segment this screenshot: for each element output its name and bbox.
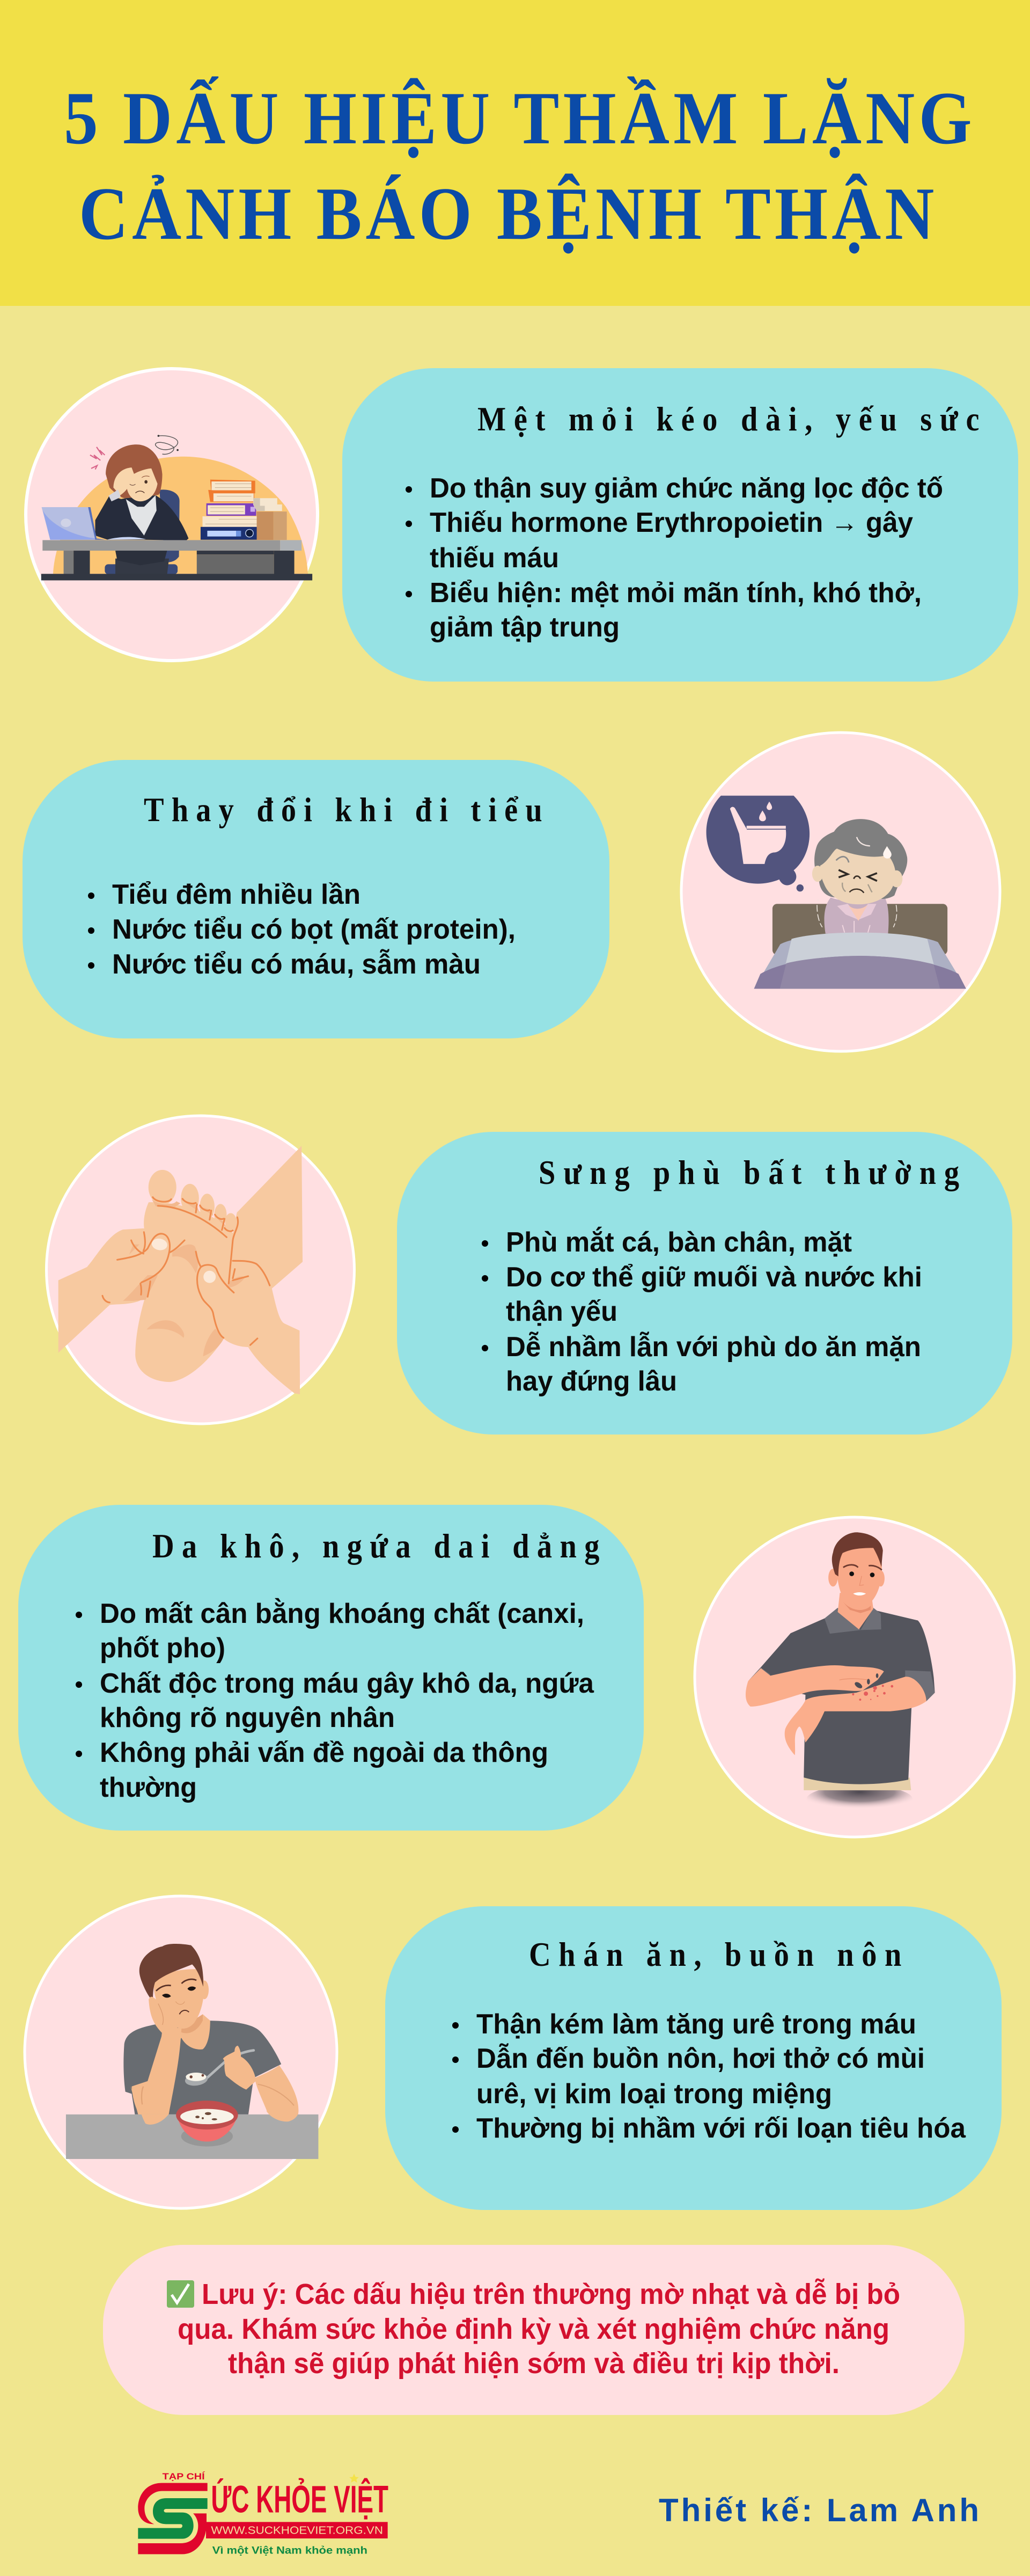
panel: sign 5 loss of appetite bbox=[385, 1906, 1002, 2210]
note text bbox=[178, 2278, 900, 2380]
panel: sign 4 dry itchy skin bbox=[18, 1505, 644, 1831]
note text: qua. Khám sức khỏe định kỳ và xét nghiệm chức năng bbox=[178, 2313, 889, 2345]
callout: note bbox=[103, 2245, 965, 2415]
heading: sign 3: Sưng phù bất thường bbox=[539, 1154, 959, 1192]
list: sign 2 bbox=[88, 879, 516, 980]
list: sign 1: thiếu máu bbox=[430, 543, 559, 574]
list: sign 4: Do mất cân bằng khoáng chất (canxi, bbox=[100, 1598, 584, 1629]
list: sign 3: thận yếu bbox=[506, 1296, 617, 1327]
list: sign 4: Không phải vấn đề ngoài da thông bbox=[100, 1737, 548, 1768]
title: CẢNH BÁO BỆNH THẬN bbox=[79, 172, 934, 255]
list: sign 3: Phù mắt cá, bàn chân, mặt bbox=[506, 1226, 852, 1258]
heading: sign 2: Thay đổi khi đi tiểu bbox=[144, 791, 542, 829]
list: sign 4: thường bbox=[100, 1772, 197, 1803]
icon: elderly woman in bed thinking of toilet bbox=[681, 733, 1000, 1051]
icon: tired office woman bbox=[26, 369, 318, 661]
title bbox=[64, 77, 972, 255]
heading: sign 1: Mệt mỏi kéo dài, yếu sức bbox=[477, 400, 979, 438]
list: sign 1: giảm tập trung bbox=[430, 612, 620, 643]
list: sign 4: phốt pho) bbox=[100, 1633, 225, 1664]
list: sign 4: không rõ nguyên nhân bbox=[100, 1702, 395, 1733]
icon: man scratching rash on arm bbox=[695, 1517, 1014, 1837]
list: sign 1: Biểu hiện: mệt mỏi mãn tính, khó thở, bbox=[430, 577, 922, 609]
header band bbox=[0, 0, 1030, 306]
heading: sign 4: Da khô, ngứa dai dẳng bbox=[152, 1527, 599, 1565]
logo: Suc Khoe Viet magazine: ỨC KHỎE VIỆT bbox=[211, 2478, 388, 2521]
list: sign 5: Thường bị nhầm với rối loạn tiêu hóa bbox=[476, 2113, 966, 2144]
list: sign 5: Thận kém làm tăng urê trong máu bbox=[476, 2009, 916, 2040]
panel: sign 2 urination changes bbox=[23, 760, 609, 1038]
list: sign 2: Nước tiểu có máu, sẫm màu bbox=[112, 949, 481, 980]
panel: sign 1 fatigue bbox=[342, 368, 1018, 682]
list: sign 3: Dễ nhầm lẫn với phù do ăn mặn bbox=[506, 1331, 921, 1363]
list: sign 1: Thiếu hormone Erythropoietin → gây bbox=[430, 507, 913, 538]
list: sign 5: Dẫn đến buồn nôn, hơi thở có mùi bbox=[476, 2043, 925, 2074]
list: sign 2: Nước tiểu có bọt (mất protein), bbox=[112, 914, 516, 945]
list: sign 3: hay đứng lâu bbox=[506, 1366, 677, 1397]
logo: Suc Khoe Viet magazine: WWW.SUCKHOEVIET.ORG.VN bbox=[211, 2525, 383, 2537]
logo: Suc Khoe Viet magazine: TẠP CHÍ bbox=[163, 2471, 205, 2482]
panel: sign 3 swelling bbox=[397, 1132, 1012, 1435]
logo: Suc Khoe Viet magazine bbox=[138, 2471, 388, 2556]
icon: man without appetite at table bbox=[25, 1896, 337, 2208]
list: sign 1: Do thận suy giảm chức năng lọc độc tố bbox=[430, 473, 943, 504]
logo: Suc Khoe Viet magazine: Vì một Việt Nam khỏe mạnh bbox=[212, 2545, 367, 2556]
list: sign 1 bbox=[406, 473, 943, 643]
list: sign 3: Do cơ thể giữ muối và nước khi bbox=[506, 1262, 922, 1293]
heading: sign 5: Chán ăn, buồn nôn bbox=[529, 1936, 901, 1974]
icon: hands massaging swollen foot bbox=[46, 1116, 354, 1424]
title: 5 DẤU HIỆU THẦM LẶNG bbox=[64, 77, 972, 159]
designer credit: Thiết kế: Lam Anh bbox=[659, 2492, 979, 2528]
note text: thận sẽ giúp phát hiện sớm và điều trị kịp thời. bbox=[228, 2347, 840, 2380]
note text: Lưu ý: Các dấu hiệu trên thường mờ nhạt và dễ bị bỏ bbox=[202, 2278, 900, 2310]
list: sign 4: Chất độc trong máu gây khô da, ngứa bbox=[100, 1668, 594, 1699]
list: sign 2: Tiểu đêm nhiều lần bbox=[112, 879, 360, 910]
list: sign 3 bbox=[482, 1226, 922, 1397]
list: sign 5 bbox=[452, 2009, 966, 2144]
icon: green check mark bbox=[167, 2280, 194, 2308]
list: sign 5: urê, vị kim loại trong miệng bbox=[476, 2079, 832, 2110]
list: sign 4 bbox=[76, 1598, 594, 1803]
